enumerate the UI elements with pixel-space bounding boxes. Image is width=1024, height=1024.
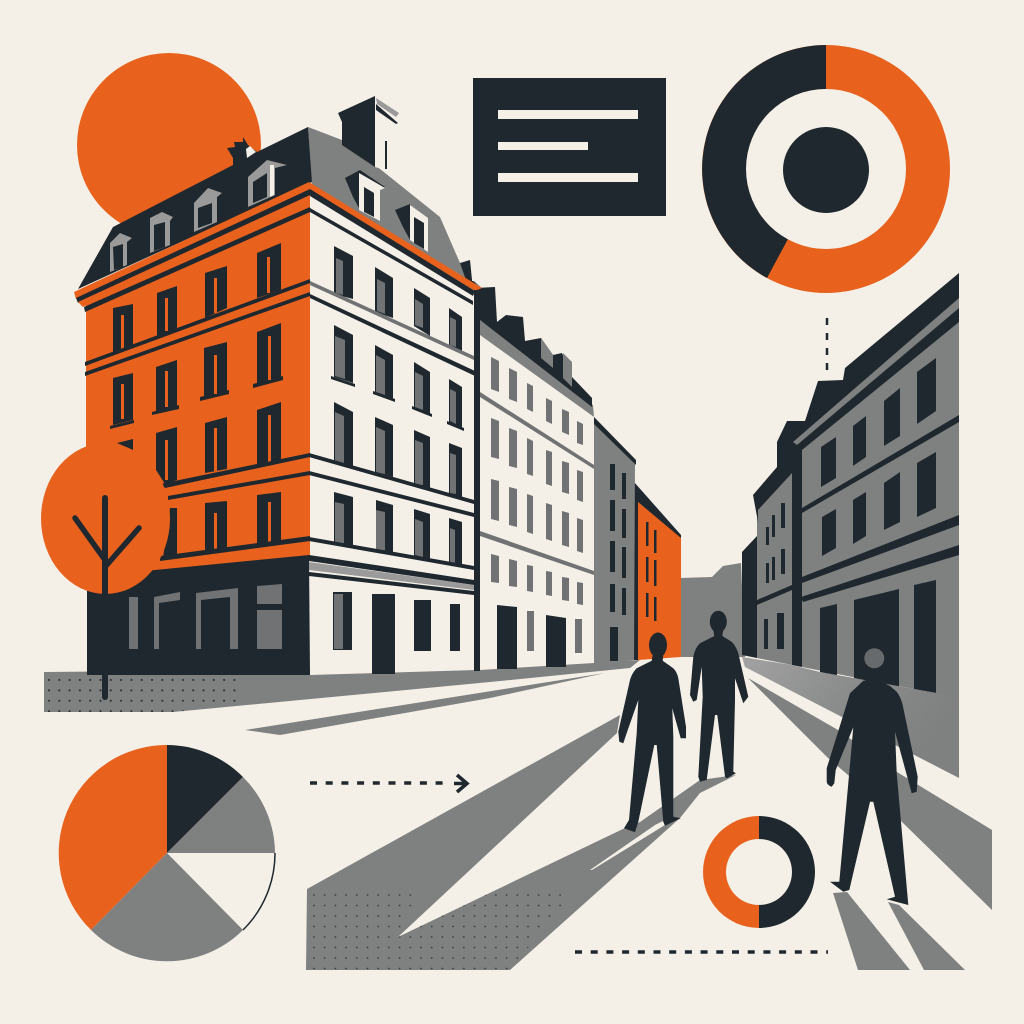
window slits [121,257,271,551]
small donut chart [703,816,815,928]
building: distant grey [594,417,636,665]
main building: roof [74,96,482,561]
dashed arrow [310,775,467,792]
window panes [335,258,456,564]
person: near left [618,632,686,832]
shadows of right figure [833,892,965,970]
ground floor dark [87,555,310,675]
ground floor openings [333,592,460,674]
long shadow right [748,678,992,910]
tree [41,443,170,697]
distant grey skyline [680,563,745,657]
small far chimney [460,260,478,286]
pie chart [59,745,275,961]
dormers left slope [110,160,287,272]
cornice bands [74,182,482,299]
pillar between buildings [474,290,480,671]
main building: orange facade [86,195,310,675]
building: distant orange [634,482,681,660]
person: near right [827,648,918,905]
string courses [310,281,474,360]
mid-block roof [475,287,592,407]
dormers right slope [345,170,428,252]
main building: white facade [309,190,476,675]
donut chart: top right [702,45,950,293]
person: far centre [690,611,748,782]
chimney [338,96,399,172]
dashed baseline [575,950,828,954]
right street buildings [742,273,959,698]
ground floor grey shapes [129,584,282,649]
white facade windows [331,246,464,566]
dashed vertical connector [826,318,828,372]
mid-block windows [491,357,583,653]
bands [802,415,959,513]
street shadow strip [245,673,605,735]
mid-block doors [497,605,566,669]
right windows [764,358,936,693]
text box icon with lines [473,78,666,216]
building: white mid-block [475,287,594,670]
icon: orange sun circle [77,53,261,237]
left sidewalk [44,660,640,712]
right roofline and pillar [753,273,959,667]
right sidewalk [742,657,959,778]
orange facade windows [110,243,283,558]
long shadow left with figure shadows [306,715,736,970]
